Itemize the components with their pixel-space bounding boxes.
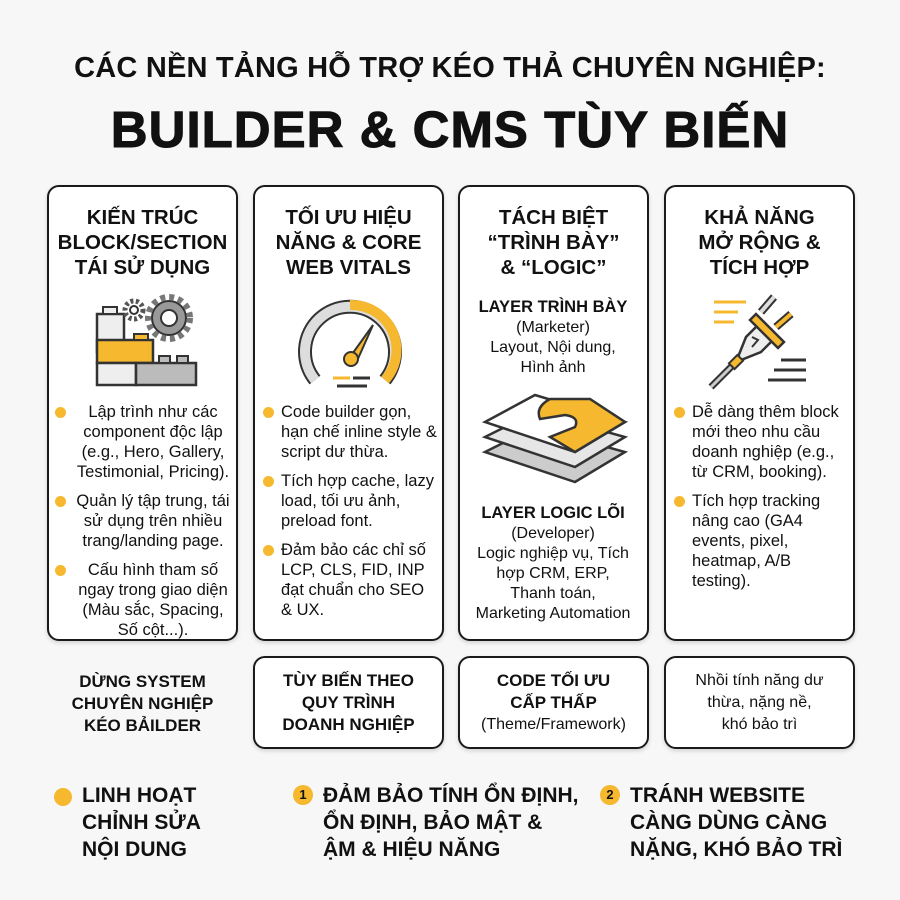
logic layer text: Marketing Automation bbox=[476, 605, 630, 622]
heading: “TRÌNH BÀY” bbox=[487, 231, 620, 254]
bullets bbox=[55, 403, 230, 639]
panel: separation bbox=[458, 185, 649, 641]
heading: TỐI ƯU HIỆU bbox=[285, 206, 412, 229]
benefit: flexible: LINH HOẠT bbox=[82, 784, 196, 807]
bullets: Code builder gọn, hạn chế inline style & script dư thừa. bbox=[281, 403, 437, 461]
logic layer text: LAYER LOGIC LÕI bbox=[481, 504, 625, 522]
benefit 1: stability: 1 bbox=[299, 787, 307, 802]
logic layer text: hợp CRM, ERP, bbox=[496, 565, 610, 582]
label: system: CHUYÊN NGHIỆP bbox=[72, 694, 213, 713]
title line 1: CÁC NỀN TẢNG HỖ TRỢ KÉO THẢ CHUYÊN NGHIỆP: bbox=[74, 52, 826, 84]
box: optimized code bbox=[458, 656, 649, 749]
panel: performance bbox=[253, 185, 444, 641]
bullets: Dễ dàng thêm block mới theo nhu cầu doanh nghiệp (e.g., từ CRM, booking). bbox=[692, 403, 839, 481]
presentation layer text: (Marketer) bbox=[516, 319, 590, 336]
panel: block/section bbox=[47, 185, 238, 641]
benefit: flexible bbox=[54, 784, 201, 861]
heading bbox=[276, 206, 421, 279]
panel: extensibility bbox=[664, 185, 855, 641]
benefit 1: stability: ẬM & HIỆU NĂNG bbox=[323, 838, 500, 861]
heading: KIẾN TRÚC bbox=[87, 206, 198, 229]
benefit 1: stability: ĐẢM BẢO TÍNH ỔN ĐỊNH, bbox=[323, 784, 578, 807]
heading: WEB VITALS bbox=[286, 256, 411, 279]
heading: TÁI SỬ DỤNG bbox=[75, 256, 210, 279]
bullets: Quản lý tập trung, tái sử dụng trên nhiều trang/landing page. bbox=[76, 492, 230, 550]
heading: & “LOGIC” bbox=[501, 256, 606, 279]
icon: layers bbox=[482, 394, 628, 484]
box: bloat: thừa, nặng nề, bbox=[707, 694, 812, 710]
icon: blocks and gears bbox=[96, 294, 198, 386]
box: customization: QUY TRÌNH bbox=[302, 692, 395, 712]
heading: TÍCH HỢP bbox=[710, 256, 809, 279]
benefit 2: avoid heavy: NẶNG, KHÓ BẢO TRÌ bbox=[630, 838, 842, 861]
benefit 2: avoid heavy: CÀNG DÙNG CÀNG bbox=[630, 811, 827, 834]
logic layer text bbox=[476, 503, 630, 622]
box: bloat bbox=[664, 656, 855, 749]
heading: KHẢ NĂNG bbox=[704, 206, 815, 229]
benefit 1: stability: ỔN ĐỊNH, BẢO MẬT & bbox=[323, 811, 542, 834]
bullets: Lập trình như các component độc lập (e.g., Hero, Gallery, Testimonial, Pricing). bbox=[77, 403, 229, 481]
heading bbox=[487, 206, 620, 279]
box: customization: TÙY BIẾN THEO bbox=[283, 670, 414, 690]
heading: NĂNG & CORE bbox=[276, 231, 421, 254]
presentation layer text: Layout, Nội dung, bbox=[490, 339, 616, 356]
box: bloat: Nhồi tính năng dư bbox=[695, 672, 824, 688]
benefit 1: stability bbox=[293, 782, 578, 861]
box: customization bbox=[253, 656, 444, 749]
icon: speedometer bbox=[298, 300, 402, 388]
benefit 2: avoid heavy: 2 bbox=[606, 787, 614, 802]
title line 2: BUILDER & CMS TÙY BIẾN bbox=[111, 101, 789, 158]
bullets bbox=[674, 402, 839, 590]
benefit 2: avoid heavy bbox=[600, 783, 842, 861]
bullets: Tích hợp cache, lazy load, tối ưu ảnh, preload font. bbox=[281, 472, 434, 530]
logic layer text: Logic nghiệp vụ, Tích bbox=[477, 545, 629, 562]
logic layer text: Thanh toán, bbox=[510, 585, 596, 602]
heading: MỞ RỘNG & bbox=[698, 231, 821, 254]
bullets: Tích hợp tracking nâng cao (GA4 events, pixel, heatmap, A/B testing). bbox=[692, 492, 820, 590]
heading: BLOCK/SECTION bbox=[58, 231, 227, 254]
benefit: flexible: NỘI DUNG bbox=[82, 838, 187, 861]
box: optimized code: CODE TỐI ƯU bbox=[497, 670, 610, 690]
presentation layer text: Hình ảnh bbox=[521, 359, 585, 376]
heading bbox=[58, 206, 227, 279]
bullets: Đảm bảo các chỉ số LCP, CLS, FID, INP đạt chuẩn cho SEO & UX. bbox=[281, 541, 426, 619]
benefit: flexible: CHỈNH SỬA bbox=[82, 811, 201, 834]
label: system bbox=[72, 672, 213, 735]
heading bbox=[698, 206, 821, 279]
logic layer text: (Developer) bbox=[511, 525, 595, 542]
presentation layer text: LAYER TRÌNH BÀY bbox=[479, 298, 627, 316]
box: optimized code: CẤP THẤP bbox=[510, 692, 597, 712]
presentation layer text bbox=[479, 297, 628, 376]
box: customization: DOANH NGHIỆP bbox=[282, 714, 415, 734]
box: bloat: khó bảo trì bbox=[722, 716, 797, 732]
icon: plug bbox=[708, 294, 806, 390]
box: optimized code: (Theme/Framework) bbox=[481, 716, 626, 732]
benefit 2: avoid heavy: TRÁNH WEBSITE bbox=[630, 784, 805, 807]
label: system: KÉO BẢILDER bbox=[84, 716, 201, 735]
bullets: Cấu hình tham số ngay trong giao diện (Màu sắc, Spacing, Số cột...). bbox=[78, 561, 228, 639]
heading: TÁCH BIỆT bbox=[499, 206, 608, 229]
label: system: DỪNG SYSTEM bbox=[79, 672, 206, 691]
bullets bbox=[263, 403, 437, 619]
